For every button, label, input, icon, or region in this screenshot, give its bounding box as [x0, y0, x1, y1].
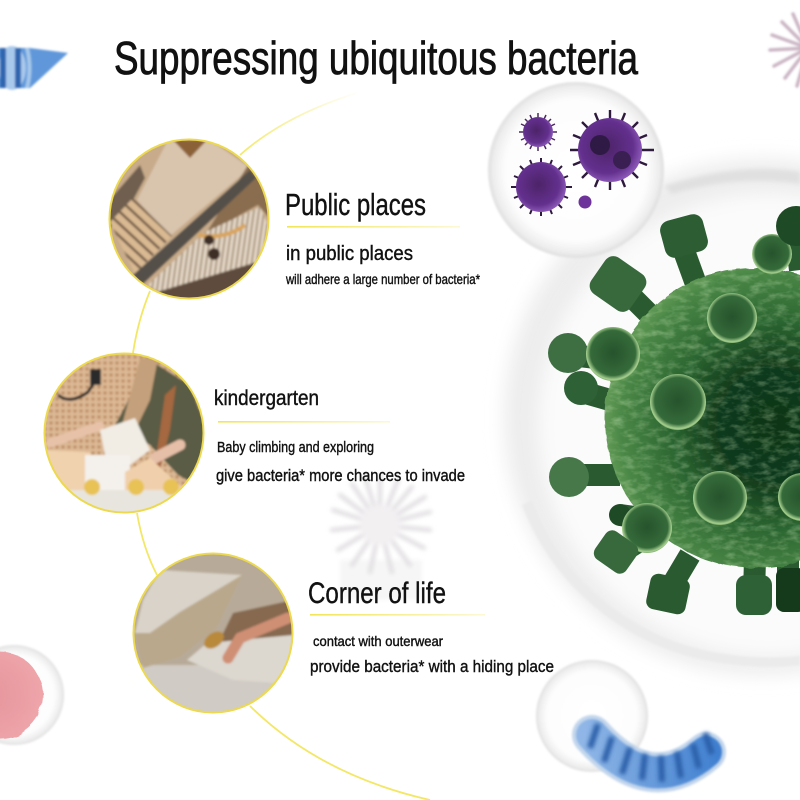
spikes behind body [570, 230, 800, 592]
photo: pillows [132, 552, 294, 714]
photo: child with toys [44, 352, 204, 514]
panel: public places [105, 135, 480, 305]
heading: Public places [285, 187, 426, 222]
body text: will adhere a large number of bacteria* [285, 271, 480, 287]
icon: large transparent bubble [504, 159, 800, 675]
underline [287, 226, 460, 228]
spherical body [605, 268, 800, 568]
icon: pale spiky microbe top right [770, 14, 800, 86]
panel: corner of life [130, 550, 554, 720]
large purple virus [570, 110, 654, 190]
title: Suppressing ubiquitous bacteria [114, 32, 638, 84]
small purple virus [519, 113, 557, 151]
heading: Corner of life [308, 577, 446, 610]
photo: staircase [108, 138, 270, 300]
body text: give bacteria* more chances to invade [216, 467, 465, 485]
decorative ghost microbe: centre [332, 476, 430, 600]
subheading: Baby climbing and exploring [217, 440, 374, 456]
subheading: contact with outerwear [313, 633, 443, 649]
tiny purple virus [578, 196, 592, 208]
icon: purple virus bubble [488, 82, 664, 258]
icon: blue bacterium bubble [536, 660, 712, 782]
icon: pink cell in bubble [0, 645, 64, 745]
medium purple virus [511, 158, 572, 216]
underline [218, 421, 390, 423]
heading: kindergarten [214, 387, 319, 410]
spike heads [548, 206, 800, 616]
icon: blue bacterium top left [0, 46, 68, 90]
connecting curve [133, 92, 430, 800]
subheading: in public places [286, 243, 413, 265]
underline [310, 614, 485, 616]
body text: provide bacteria* with a hiding place [310, 657, 554, 676]
icon: green virus [548, 206, 800, 616]
panel: kindergarten [40, 350, 465, 520]
